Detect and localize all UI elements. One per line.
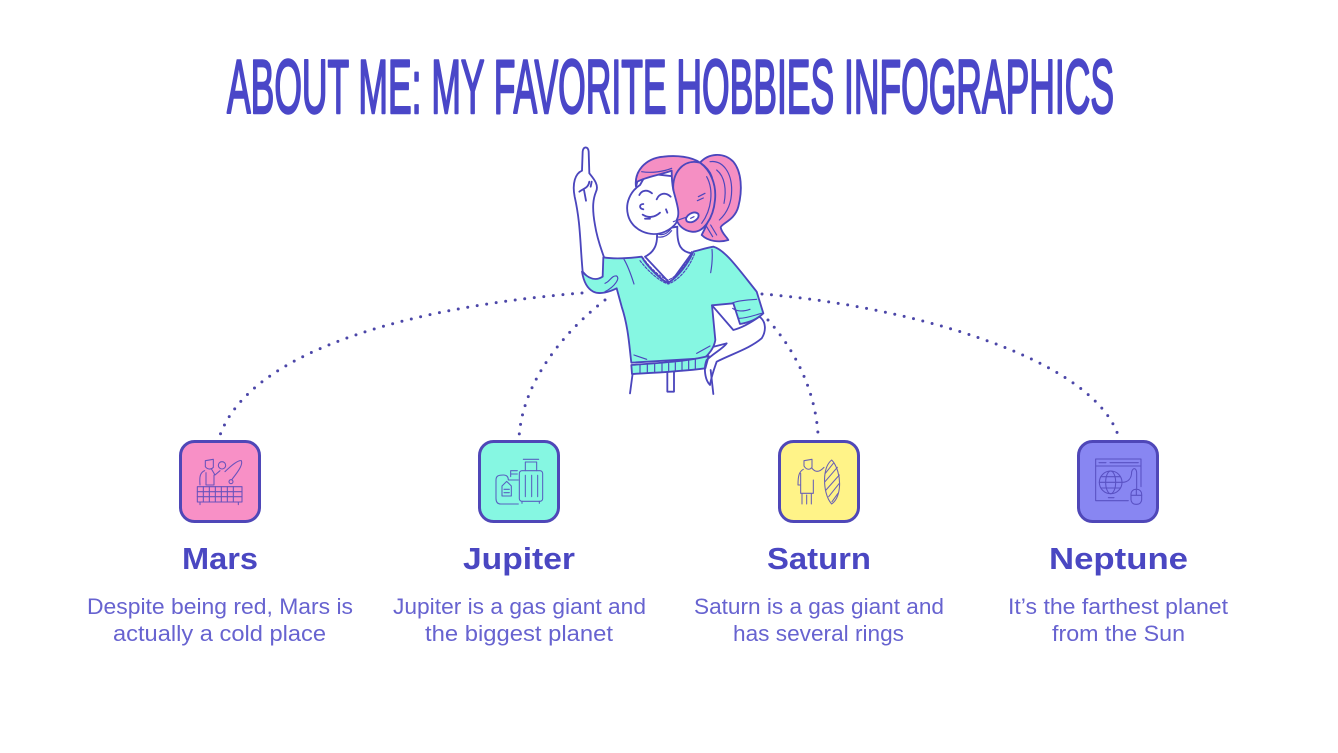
description: Saturn: has several rings [733, 621, 904, 646]
description: Neptune: from the Sun [1052, 621, 1185, 646]
earring [686, 213, 699, 222]
description: Mars: Despite being red, Mars is [87, 594, 353, 619]
item: Jupiter [393, 442, 646, 646]
description: Saturn [694, 594, 944, 646]
face [627, 173, 681, 234]
sweater [582, 247, 763, 363]
icon box: Mars [180, 442, 260, 522]
hair front [636, 156, 715, 232]
neck [645, 227, 692, 283]
description: Jupiter [393, 594, 646, 646]
collar [640, 252, 695, 284]
item: Neptune [1008, 442, 1228, 646]
eyes and smile [639, 191, 671, 219]
icon: surfer [798, 459, 840, 504]
dotted connectors [219, 293, 1118, 438]
description: Mars: actually a cold place [113, 621, 326, 646]
item: Saturn [694, 442, 944, 646]
description: Jupiter: Jupiter is a gas giant and [393, 594, 646, 619]
icon: billiards player [197, 459, 242, 505]
jeans [630, 370, 713, 394]
description: Saturn: Saturn is a gas giant and [694, 594, 944, 619]
description: Neptune [1008, 594, 1228, 646]
item: Mars [87, 442, 353, 646]
heading: Jupiter: Jupiter [463, 541, 575, 576]
icon: luggage [496, 459, 543, 504]
icon box: Jupiter [480, 442, 558, 522]
heading: Neptune: Neptune [1049, 541, 1188, 576]
description: Neptune: It’s the farthest planet [1008, 594, 1228, 619]
raised arm [574, 147, 604, 282]
waistband [631, 356, 709, 374]
description: Jupiter: the biggest planet [425, 621, 613, 646]
heading: Saturn: Saturn [767, 541, 871, 576]
description: Mars [87, 594, 353, 646]
icon box: Neptune [1078, 442, 1158, 522]
icon: web browser [1096, 459, 1142, 504]
illustration: woman pointing up [574, 147, 765, 394]
ponytail [700, 155, 741, 241]
hand on hip [705, 305, 765, 385]
heading: Mars: Mars [182, 541, 258, 576]
icon box: Saturn [780, 442, 858, 522]
